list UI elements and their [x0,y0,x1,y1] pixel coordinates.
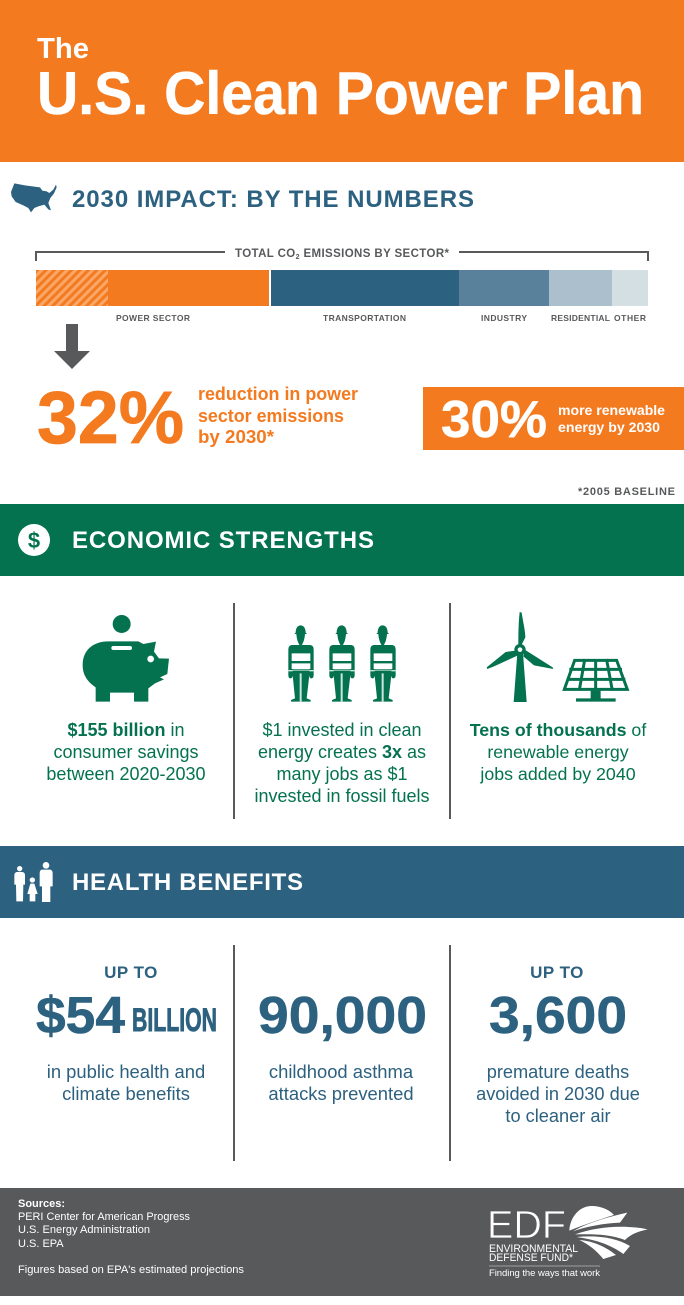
text: energy creates 3x as [258,742,426,762]
panel: 2030 impact [11,183,684,498]
bar labels [116,313,646,323]
icon: USA map [11,183,57,212]
sources: U.S. Energy Administration [18,1224,150,1236]
panel: economic column 2 [254,625,430,806]
text [46,720,206,784]
bar labels: RESIDENTIAL [551,313,610,323]
text: $1 invested in clean [262,720,422,740]
logo: EDF: EDF [487,1204,566,1247]
text [476,1062,640,1126]
logo: EDF: Finding the ways that work [489,1268,600,1279]
callout: 30 percent [423,387,684,450]
text [47,1061,205,1104]
footnote: *2005 BASELINE [578,486,675,498]
icon: piggy bank [83,615,169,702]
bar labels: TRANSPORTATION [323,313,406,323]
arrow: down [54,324,90,369]
text: premature deaths [487,1062,629,1082]
stat: $54 [36,987,125,1045]
callout: 30 percent: more renewable [558,403,666,418]
label: UP TO [530,963,584,982]
icon: workers [288,625,396,702]
worker 1 [288,625,314,702]
panel: economic strengths heading [0,504,684,576]
callout: 30 percent: 30% [441,391,547,449]
text [470,720,646,784]
stat text: reduction [198,384,358,447]
text: jobs added by 2040 [479,764,636,784]
panel: economic column 1 [46,615,206,784]
title: The [37,33,89,65]
chart title: EMISSIONS BY SECTOR* [300,248,450,260]
text: $155 billion in [67,720,185,740]
worker 3 [370,625,396,702]
panel: health column 3 [476,963,640,1126]
label: UP TO [104,963,158,982]
heading: HEALTH BENEFITS [72,869,303,896]
stat: BILLION [132,1002,217,1038]
header banner [0,0,684,162]
sources [18,1198,244,1276]
text: invested in fossil fuels [254,786,430,806]
title: U.S. Clean Power Plan [37,60,644,127]
stat: 3,600 [489,987,627,1045]
heading: 2030 IMPACT: BY THE NUMBERS [72,186,474,213]
panel: health column 1 [36,963,217,1104]
text: renewable energy [487,742,629,762]
icon: wind turbine [487,612,553,702]
chart title: TOTAL CO [235,248,295,260]
text: attacks prevented [268,1083,414,1104]
callout: 30 percent: energy by 2030 [558,420,660,435]
text: in public health and [47,1061,205,1082]
text: Tens of thousands of [470,720,646,740]
text: consumer savings [53,742,199,762]
text: many jobs as $1 [276,764,408,784]
chart heading bracket [36,252,648,261]
icon: family [14,862,53,902]
stat text: reduction: by 2030* [198,427,274,447]
text [268,1061,414,1104]
text: childhood asthma [269,1061,414,1082]
sources: Sources: [18,1198,65,1210]
bar labels: POWER SECTOR [116,313,190,323]
footer [0,1188,684,1296]
stat text: reduction: sector emissions [198,406,344,426]
text: to cleaner air [505,1106,611,1126]
title [37,33,644,127]
stat: 90,000 [258,987,427,1045]
text: between 2020-2030 [46,764,206,784]
heading: ECONOMIC STRENGTHS [72,527,374,554]
stat: 32 percent: 32% [37,376,184,459]
bar labels: INDUSTRY [481,313,527,323]
panel: health column 2 [258,987,427,1104]
sources: U.S. EPA [18,1238,64,1250]
text [254,720,430,806]
sources: PERI Center for American Progress [18,1211,190,1223]
sources: Figures based on EPA's estimated projections [18,1264,244,1276]
text: avoided in 2030 due [476,1084,640,1104]
icon: solar panel [564,659,627,702]
stat [36,987,217,1045]
column dividers [234,603,450,1161]
worker 2 [329,625,355,702]
logo: EDF: DEFENSE FUND* [489,1252,574,1264]
stacked bar chart [36,270,648,306]
bar labels: OTHER [614,313,646,323]
stat text: reduction: reduction in power [198,384,358,404]
icon: dollar [18,524,50,556]
logo: EDF: ENVIRONMENTAL [489,1243,578,1255]
panel: economic column 3 [470,612,646,784]
panel: health benefits heading [0,846,684,918]
text: climate benefits [62,1083,190,1104]
chart title: 2 [296,254,300,261]
icon: dollar: $ [28,528,40,553]
logo: EDF [487,1204,648,1279]
